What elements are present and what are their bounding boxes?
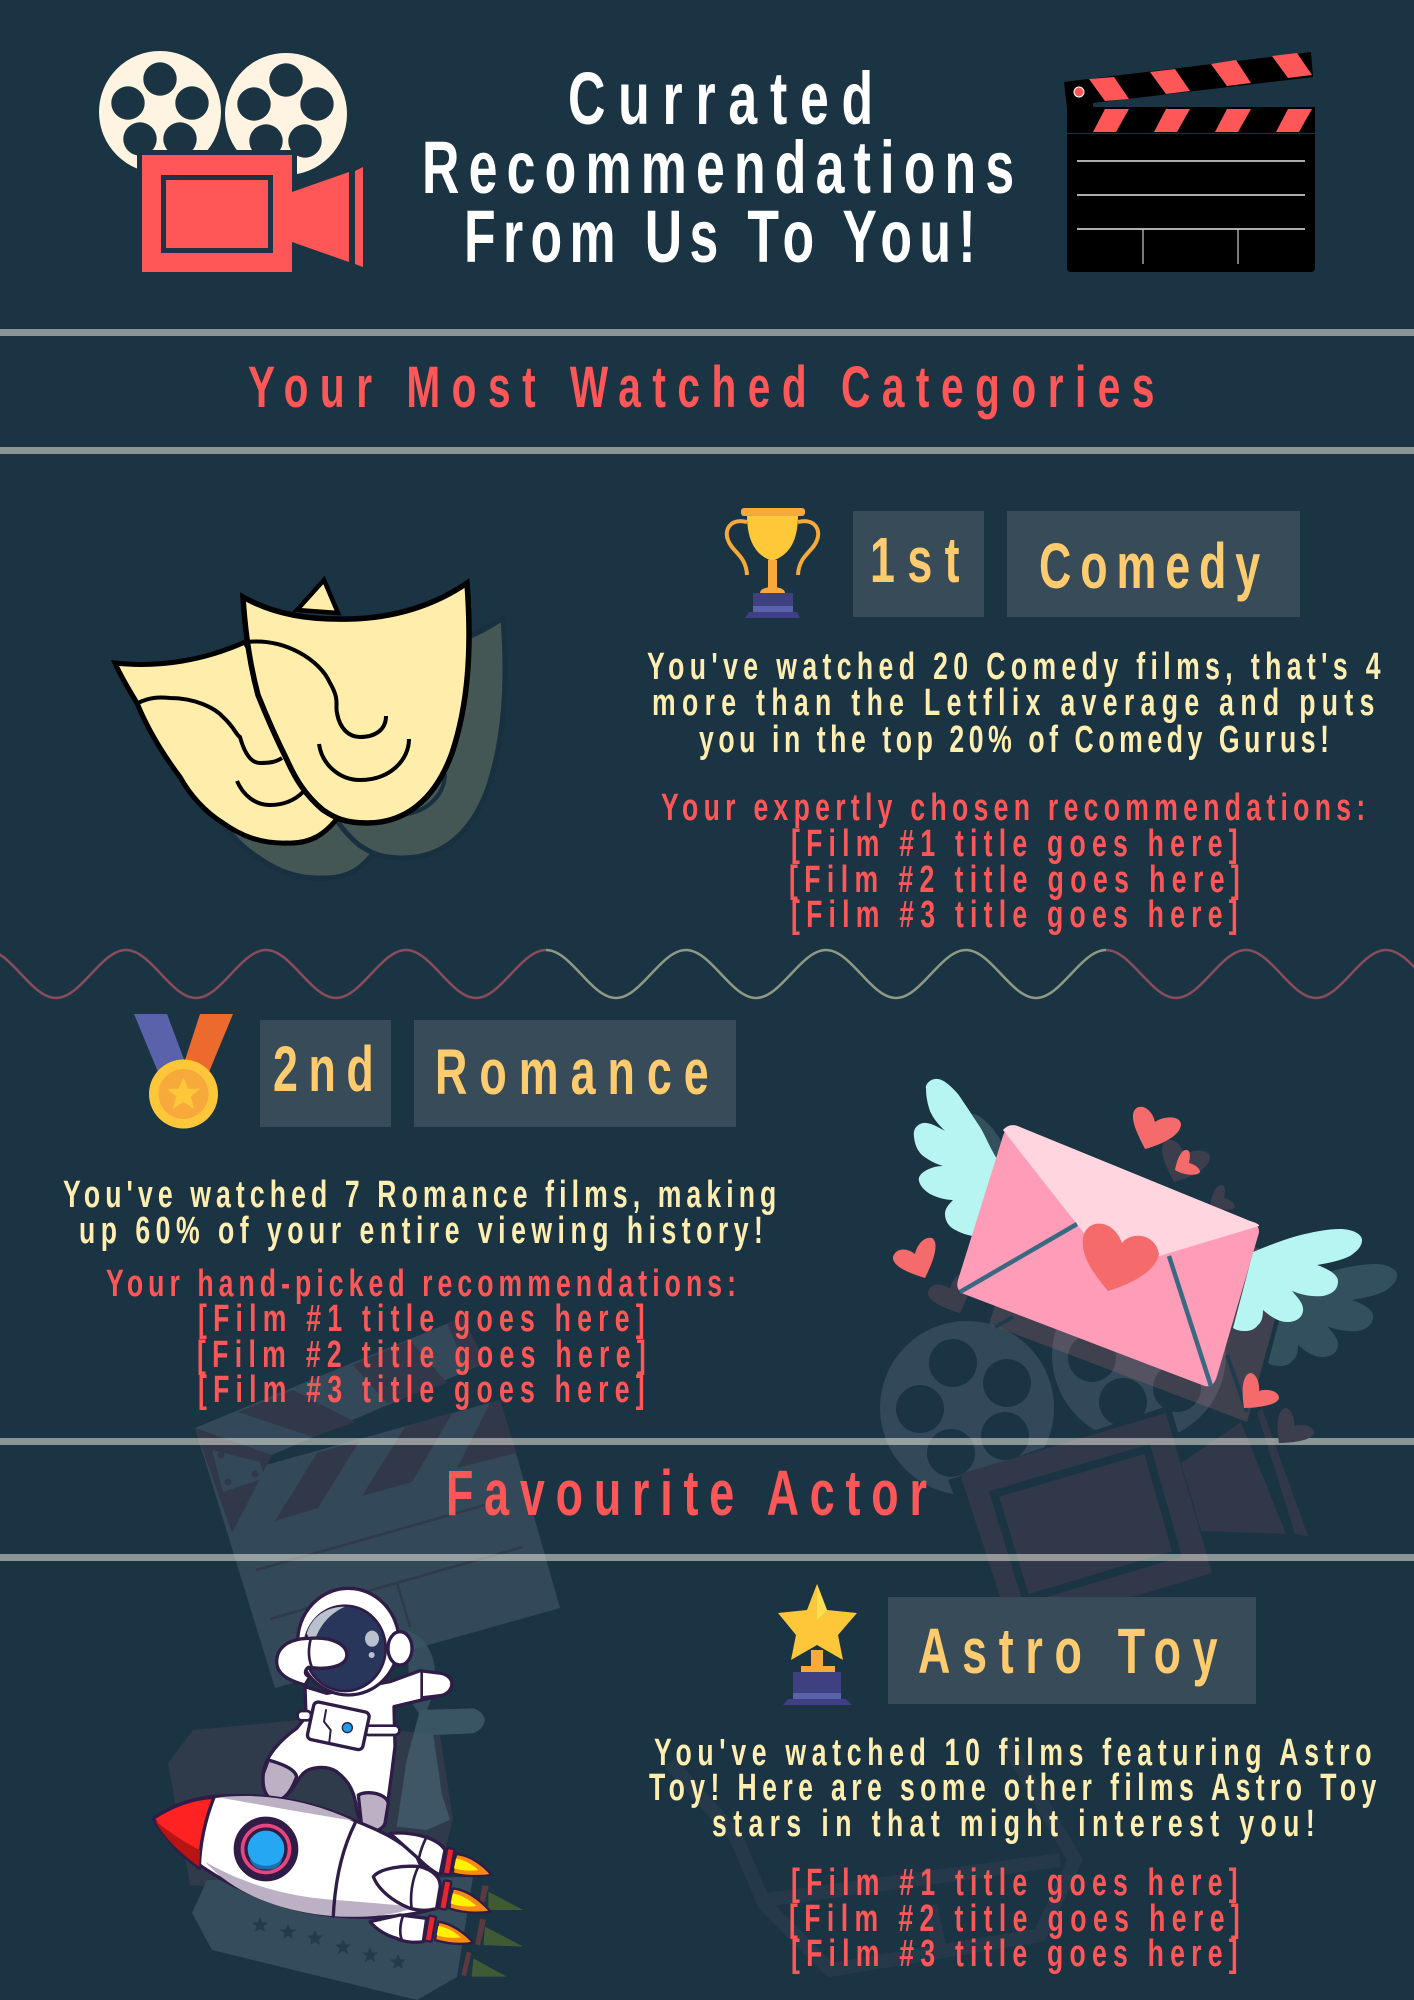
text: actor stats xyxy=(649,1730,1377,1844)
panel: first rank xyxy=(853,511,984,617)
raised arm xyxy=(277,1638,347,1685)
icon: comedy and tragedy masks xyxy=(115,580,505,878)
text: actor recommendations: [Film #3 title goes here] xyxy=(791,1931,1238,1974)
belt xyxy=(364,1726,399,1735)
flames xyxy=(453,1854,492,1876)
text: comedy stats: more than the Letflix average and puts xyxy=(652,680,1374,723)
text: romance recommendations: [Film #3 title goes here] xyxy=(198,1367,645,1410)
icon: astronaut on rocket xyxy=(153,1588,523,1977)
chest pack xyxy=(307,1701,370,1750)
helmet xyxy=(298,1588,399,1695)
panel: second rank xyxy=(260,1020,391,1127)
title: From Us To You! xyxy=(464,195,976,278)
text: comedy recommendations: Your expertly chosen recommendations: xyxy=(661,785,1365,828)
watermark: 3D glasses xyxy=(670,1740,1075,1970)
text: actor stats: stars in that might interest you! xyxy=(712,1801,1315,1844)
fins and nozzles xyxy=(390,1833,445,1875)
text: romance stats: up 60% of your entire viewing history! xyxy=(79,1208,763,1251)
icon: medal xyxy=(134,1014,233,1128)
text: romance recommendations: [Film #2 title goes here] xyxy=(197,1332,646,1375)
text: actor stats: Toy! Here are some other films Astro Toy xyxy=(649,1765,1377,1808)
text: comedy stats: you in the top 20% of Comedy Gurus! xyxy=(699,717,1329,760)
panel: comedy label: Comedy xyxy=(1039,530,1260,602)
rocket window xyxy=(235,1818,297,1880)
title xyxy=(422,57,1014,278)
watermark: tickets xyxy=(168,1720,473,2000)
text: romance recommendations xyxy=(106,1261,736,1410)
text: comedy recommendations: [Film #2 title goes here] xyxy=(789,857,1240,900)
section dividers xyxy=(0,329,1414,1561)
text: actor recommendations: [Film #1 title goes here] xyxy=(791,1860,1238,1903)
text: comedy stats xyxy=(647,644,1381,760)
text: romance recommendations: Your hand-picked recommendations: xyxy=(106,1261,736,1304)
panel: romance label: Romance xyxy=(435,1036,709,1108)
icon: film projector xyxy=(99,51,363,272)
suit body xyxy=(263,1671,452,1831)
text: romance stats: You've watched 7 Romance films, making xyxy=(63,1172,776,1215)
text: romance stats xyxy=(63,1172,776,1251)
panel: actor name: Astro Toy xyxy=(918,1615,1218,1687)
rocket body xyxy=(153,1796,440,1917)
text: comedy recommendations: [Film #1 title goes here] xyxy=(791,821,1238,864)
text: actor recommendations xyxy=(789,1860,1240,1974)
astronaut and rocket shadow xyxy=(397,1630,523,1977)
text: actor stats: You've watched 10 films featuring Astro xyxy=(654,1730,1371,1773)
title: Recommendations xyxy=(422,126,1014,209)
text: romance recommendations: [Film #1 title goes here] xyxy=(198,1296,645,1339)
icon: clapperboard xyxy=(1064,52,1315,272)
title: Currated xyxy=(568,57,873,140)
text: comedy recommendations: [Film #3 title goes here] xyxy=(791,892,1238,935)
icon: trophy xyxy=(727,508,818,618)
panel: actor name xyxy=(888,1597,1256,1704)
heading: your most watched categories: Your Most Watched Categories xyxy=(248,355,1154,420)
wavy separator xyxy=(0,950,1414,998)
heading: favourite actor: Favourite Actor xyxy=(446,1457,927,1529)
text: comedy recommendations xyxy=(661,785,1365,935)
panel: second rank: 2nd xyxy=(273,1033,374,1105)
text: actor recommendations: [Film #2 title goes here] xyxy=(789,1896,1240,1939)
icon: star award xyxy=(778,1584,857,1705)
text: comedy stats: You've watched 20 Comedy films, that's 4 xyxy=(647,644,1381,687)
panel: romance label xyxy=(414,1020,736,1127)
panel: first rank: 1st xyxy=(870,524,960,596)
panel: comedy label xyxy=(1007,511,1300,617)
watermark: projector camera xyxy=(880,1268,1308,1640)
watermark: clapperboard xyxy=(195,1317,560,1688)
icon: winged love letter xyxy=(893,1079,1397,1443)
